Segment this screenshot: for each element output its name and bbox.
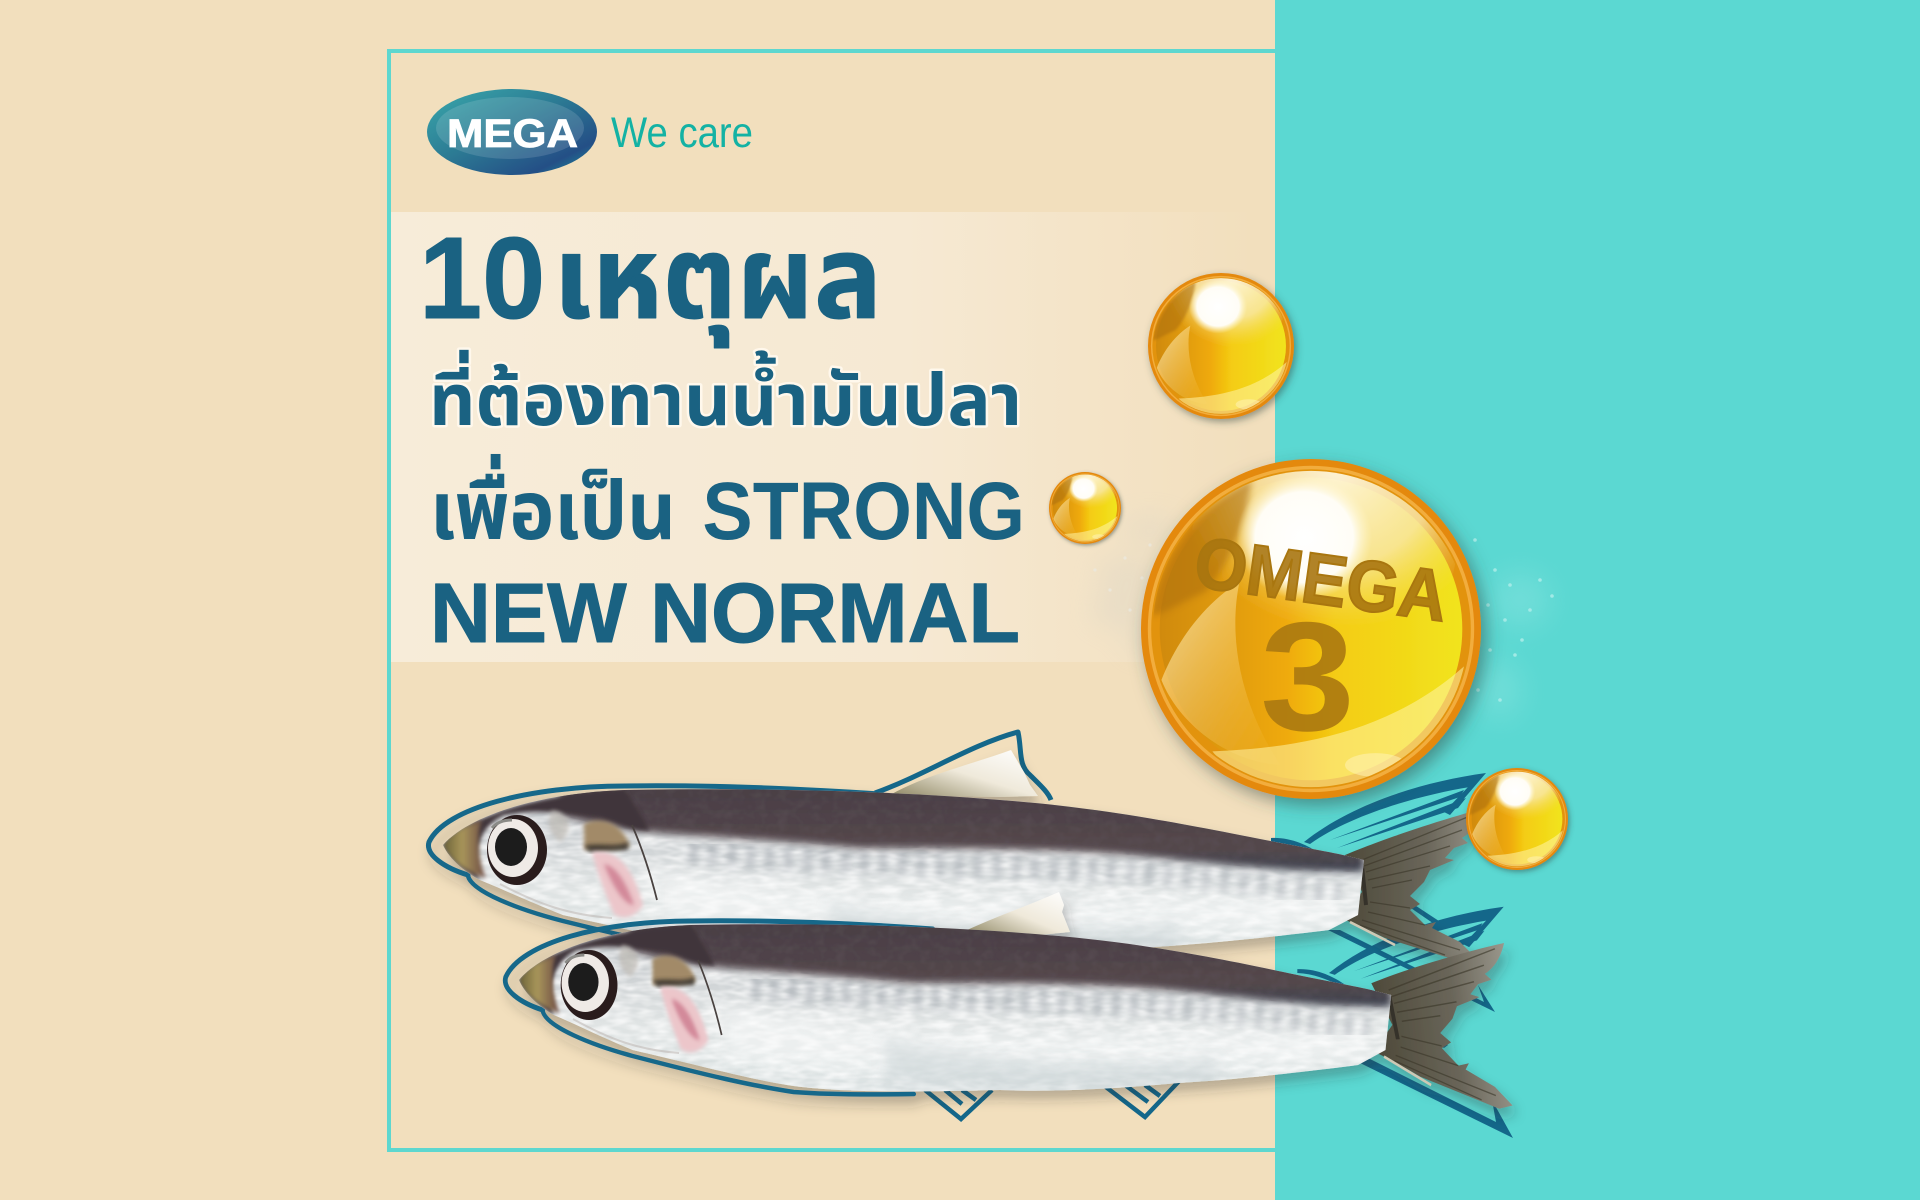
large drop bbox=[1141, 408, 1481, 799]
oil drop: large Omega 3 bbox=[1141, 408, 1481, 799]
background: teal right area bbox=[1275, 0, 1920, 1200]
tagline: We care bbox=[611, 109, 753, 157]
fish one lower tail outline bbox=[1328, 900, 1495, 1012]
fish outline: lower fins bbox=[925, 1078, 1182, 1119]
tail of fish one bbox=[1340, 808, 1485, 962]
title line 2: ที่ต้องทานน้ำมันปลา bbox=[429, 350, 1022, 441]
title line 4: NEW NORMAL bbox=[430, 566, 1020, 660]
title line 1: 10 เหตุผล bbox=[419, 213, 882, 348]
label 3: 3 bbox=[1260, 590, 1355, 763]
logo: MEGA We care bbox=[427, 89, 753, 175]
fish outline: tail fins on teal bbox=[1271, 773, 1513, 1138]
fish two bbox=[505, 892, 1522, 1111]
outline of fish two bbox=[505, 921, 933, 1094]
oil drop: small bbox=[1049, 461, 1121, 544]
particle spray around large drop bbox=[1090, 518, 1554, 720]
body of fish one bbox=[440, 780, 1370, 960]
logo oval: MEGA bbox=[447, 112, 578, 156]
dorsal fin bbox=[967, 892, 1070, 936]
fish outline: dorsal fin bbox=[875, 732, 1051, 800]
fish two upper tail outline bbox=[1297, 907, 1504, 986]
title bbox=[419, 213, 1025, 660]
background: beige left area bbox=[0, 0, 1275, 1200]
frame border bbox=[389, 51, 1275, 1150]
fish one bbox=[428, 750, 1485, 962]
outline of fish one bbox=[428, 786, 880, 959]
body of fish two bbox=[516, 915, 1397, 1095]
oil drop: right bbox=[1466, 753, 1568, 870]
title backing panel bbox=[391, 212, 1251, 662]
dorsal fin bbox=[890, 750, 1038, 797]
logo oval bbox=[427, 89, 597, 175]
upper tail outline bbox=[1271, 773, 1486, 856]
label OMEGA: OMEGA bbox=[1190, 523, 1452, 637]
title line 3: เพื่อเป็น STRONG bbox=[430, 453, 1025, 557]
oil drop: medium bbox=[1148, 251, 1294, 419]
tail of fish two bbox=[1361, 932, 1522, 1111]
fish two lower tail outline bbox=[1354, 1032, 1513, 1138]
